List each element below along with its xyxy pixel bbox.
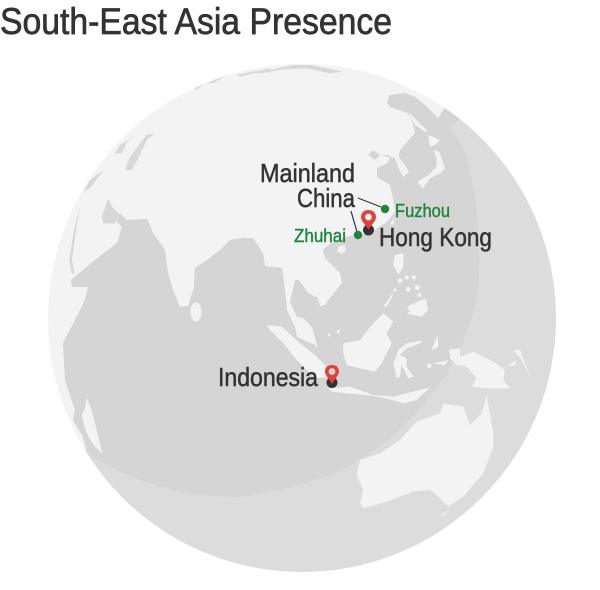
oceans, unlit side — [86, 119, 556, 572]
Sakhalin and Japan — [408, 112, 445, 188]
title: South-East Asia Presence — [0, 1, 392, 42]
marker: Fuzhou: Fuzhou — [395, 201, 450, 221]
marker: Zhuhai: Zhuhai — [294, 226, 346, 246]
Hainan — [337, 245, 346, 254]
label: China: China — [297, 183, 355, 213]
globe land base — [48, 64, 444, 452]
islands — [82, 112, 530, 517]
Taiwan, Philippines — [383, 217, 428, 317]
callout: Mainland China — [260, 158, 355, 213]
Sumatra, Borneo, Sulawesi, Java, New Guinea, Australia — [267, 300, 530, 517]
leader lines — [351, 198, 381, 232]
label: Mainland: Mainland — [260, 158, 355, 188]
Madagascar — [82, 397, 102, 453]
globe map — [48, 64, 556, 572]
Sri Lanka — [190, 302, 202, 322]
marker: Hong Kong — [361, 210, 492, 252]
marker: Indonesia: Indonesia — [218, 362, 318, 392]
inland seas and northern water — [69, 68, 272, 273]
oceans, lit side — [63, 93, 444, 450]
marker: Hong Kong: Hong Kong — [379, 222, 492, 252]
